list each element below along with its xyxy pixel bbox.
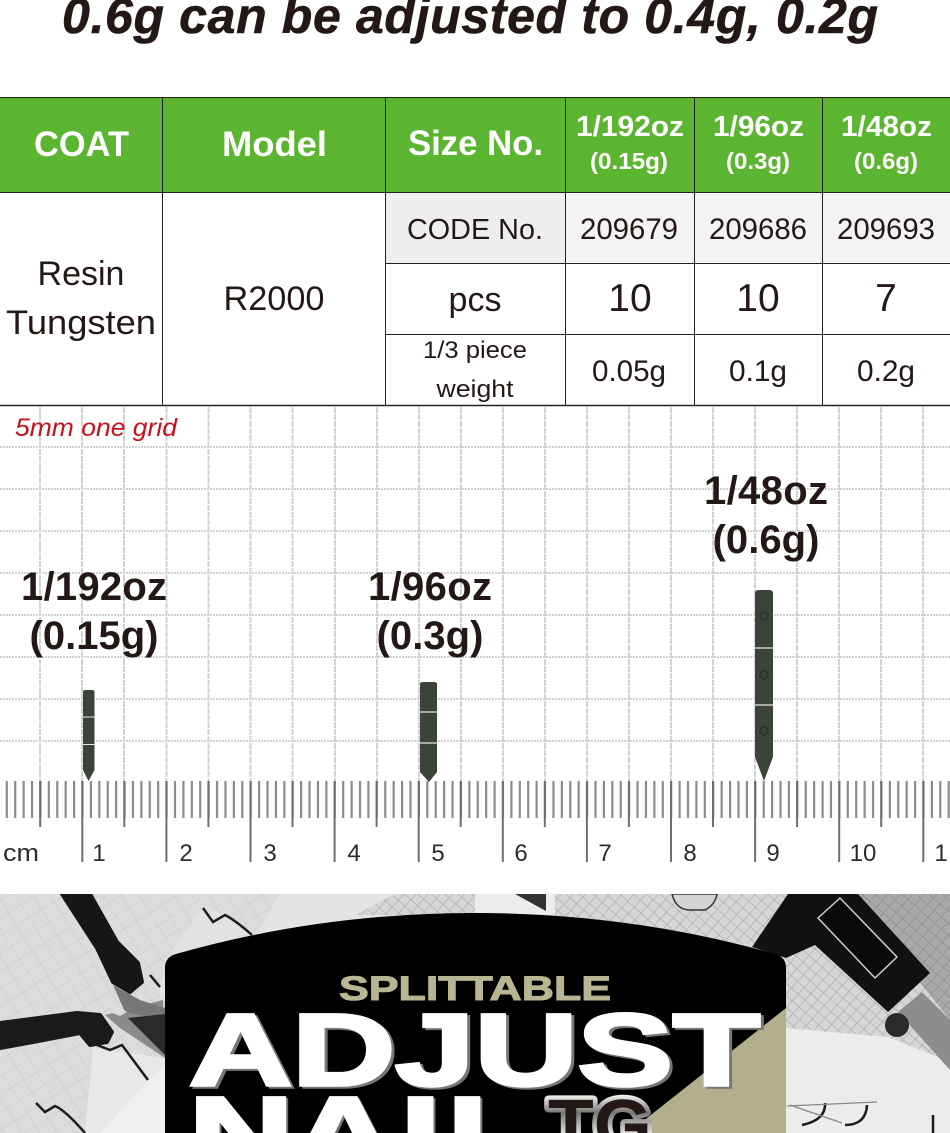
label 1/96oz: 1/96oz — [368, 565, 492, 609]
ruler — [3, 781, 950, 867]
table header band — [0, 98, 950, 192]
table body values: 1/3 piece — [423, 337, 527, 364]
nail 1/192oz — [83, 690, 94, 781]
header labels: 1/96oz — [713, 111, 804, 143]
photo background papers — [0, 894, 950, 1133]
nail 1/96oz — [420, 682, 437, 782]
table body values: pcs — [449, 281, 501, 319]
ADJUST logo text — [189, 993, 763, 1109]
table body values: 209686 — [709, 213, 807, 246]
table body values: 0.1g — [729, 355, 787, 388]
digital caliper — [752, 894, 950, 1070]
ruler: cm — [3, 840, 39, 867]
label 1/192oz: (0.15g) — [30, 614, 158, 658]
table body values: 209679 — [580, 213, 678, 246]
grid scale note: 5mm one grid — [15, 414, 178, 442]
table body values: 7 — [875, 277, 897, 320]
table body values: weight — [435, 376, 514, 403]
header labels: (0.3g) — [726, 148, 790, 174]
label 1/48oz: (0.6g) — [712, 518, 820, 562]
table body values: CODE No. — [407, 214, 543, 246]
grid paper — [0, 407, 950, 781]
label 1/96oz — [368, 565, 492, 658]
ruler: 1 — [934, 840, 948, 867]
specification table — [0, 98, 950, 406]
ruler: 5 — [431, 840, 445, 867]
header labels: COAT — [34, 125, 129, 164]
ruler: 7 — [598, 840, 612, 867]
size comparison chart on grid — [0, 407, 950, 867]
beige corner panel — [628, 1008, 786, 1133]
label 1/192oz: 1/192oz — [21, 565, 167, 609]
table body values: Tungsten — [6, 304, 156, 342]
label 1/48oz — [704, 469, 828, 562]
ruler: 1 — [92, 840, 106, 867]
ruler: 10 — [850, 840, 876, 867]
table body values: 10 — [608, 277, 652, 320]
ADJUST logo text: ADJUST — [189, 993, 760, 1107]
table body values — [6, 213, 935, 403]
product photo banner — [0, 894, 950, 1133]
nail 1/48oz — [755, 590, 773, 781]
header labels: 1/48oz — [841, 111, 932, 143]
ruler: 2 — [179, 840, 193, 867]
SPLITTABLE heading: SPLITTABLE — [339, 970, 611, 1008]
label 1/192oz — [21, 565, 167, 658]
label 1/96oz: (0.3g) — [376, 614, 484, 658]
header labels: (0.15g) — [590, 148, 668, 174]
ADJUST logo text: ADJUST — [192, 995, 763, 1109]
header labels: 1/192oz — [576, 111, 684, 143]
ruler: 4 — [347, 840, 361, 867]
table body values: 0.05g — [592, 355, 666, 388]
table body values: Resin — [38, 255, 124, 293]
table body values: 10 — [736, 277, 780, 320]
table body values: 209693 — [837, 213, 935, 246]
bent wire hooks — [36, 908, 933, 1133]
header labels: Model — [222, 125, 327, 164]
ruler: 8 — [683, 840, 697, 867]
ruler: 6 — [514, 840, 528, 867]
label 1/48oz: 1/48oz — [704, 469, 828, 513]
black product card — [165, 913, 786, 1133]
ruler: 9 — [766, 840, 780, 867]
header labels: Size No. — [408, 124, 543, 163]
header labels — [34, 111, 932, 174]
ruler: 3 — [263, 840, 277, 867]
pliers — [0, 894, 165, 1058]
table body values: R2000 — [224, 280, 324, 318]
header labels: (0.6g) — [854, 148, 918, 174]
table body values: 0.2g — [857, 355, 915, 388]
